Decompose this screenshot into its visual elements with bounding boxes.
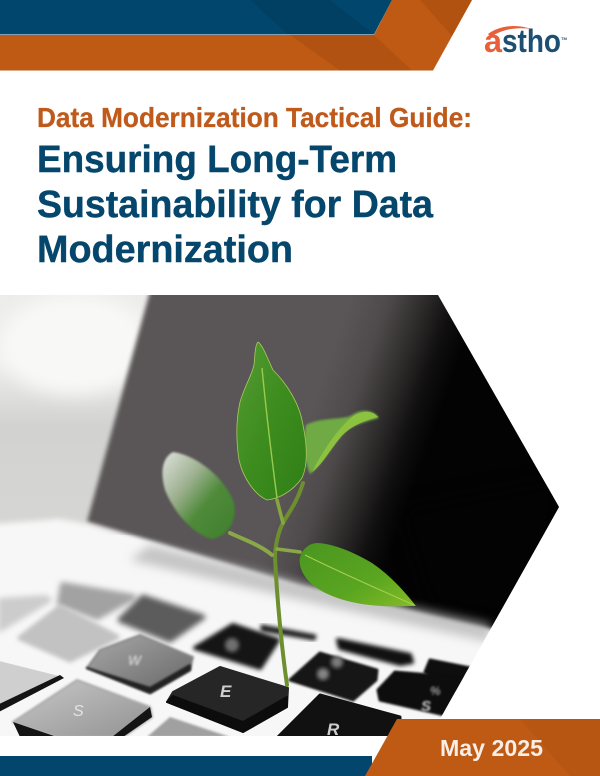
back right leaf xyxy=(304,411,379,474)
stem xyxy=(230,483,303,685)
key letters: R xyxy=(327,720,340,739)
top banner xyxy=(0,0,472,70)
orange block xyxy=(365,719,600,776)
laptop screen xyxy=(84,295,559,632)
blue bar xyxy=(0,756,372,776)
key letters xyxy=(73,652,441,739)
bottom banner xyxy=(0,719,600,776)
logo: astho: stho xyxy=(502,23,561,59)
hexagonal photo: seedling on laptop keyboard xyxy=(0,295,559,736)
logo: astho: a xyxy=(484,23,502,59)
laptop base xyxy=(0,517,490,630)
key letters: S xyxy=(73,703,84,720)
background wall xyxy=(0,295,148,535)
key letters: S xyxy=(421,698,431,715)
title line 3: Modernization xyxy=(37,229,293,271)
key letters: E xyxy=(220,682,232,701)
title block xyxy=(37,102,472,271)
title line 2: Sustainability for Data xyxy=(37,184,434,226)
logo: astho: TM xyxy=(561,36,567,41)
title line 1: Ensuring Long-Term xyxy=(37,139,397,181)
plant xyxy=(162,342,416,685)
blurred left leaf xyxy=(162,452,235,539)
subtitle: Data Modernization Tactical Guide: xyxy=(37,102,472,133)
key letters: % xyxy=(430,684,441,698)
keyboard keys xyxy=(0,585,470,745)
orange band xyxy=(0,0,472,70)
key letters: W xyxy=(128,652,143,668)
date: May 2025 xyxy=(440,735,543,761)
blue band xyxy=(0,0,392,34)
main leaf xyxy=(237,342,306,500)
bottom right leaf xyxy=(300,543,416,606)
